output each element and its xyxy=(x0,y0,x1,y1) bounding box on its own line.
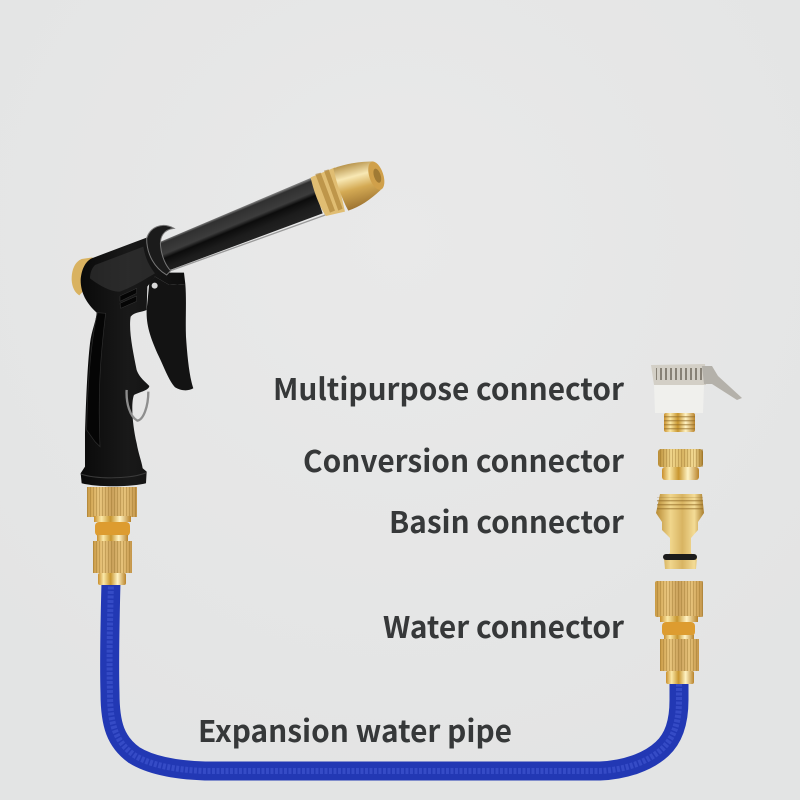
icon: trigger xyxy=(147,277,193,390)
icon: hanging ring xyxy=(127,390,148,421)
label: basin connector: Basin connector xyxy=(389,498,625,542)
barrel collar ring xyxy=(147,225,174,275)
threaded brass outlet xyxy=(664,413,695,432)
label: water connector: Water connector xyxy=(383,603,625,647)
vent slots xyxy=(120,288,137,308)
label: expansion water pipe: Expansion water pipe xyxy=(198,707,512,751)
water connector part xyxy=(655,581,703,684)
expansion water pipe hose xyxy=(110,582,679,771)
gun hose fitting xyxy=(87,487,137,585)
grip base collar edge xyxy=(81,473,147,478)
multipurpose connector part xyxy=(651,364,742,432)
grip side panel xyxy=(87,313,106,447)
gun side large knurled nut xyxy=(87,487,137,517)
polished ferrule xyxy=(666,671,694,684)
orange ring xyxy=(662,622,695,636)
black o-ring xyxy=(663,554,697,560)
hose side knurled nut xyxy=(93,541,132,573)
label: conversion connector: Conversion connector xyxy=(303,437,625,481)
icon: rear brass knob xyxy=(72,257,93,295)
gun body and grip xyxy=(81,238,185,486)
conversion connector part xyxy=(658,449,703,480)
barrel lower edge highlight xyxy=(171,215,325,271)
hose side polished ferrule xyxy=(98,573,126,585)
metal barrel xyxy=(161,178,323,271)
icon: trigger pin xyxy=(152,283,158,289)
basin connector part xyxy=(656,494,704,569)
label: multipurpose connector: Multipurpose connector xyxy=(273,365,625,409)
icon: brass nozzle xyxy=(311,160,387,216)
orange quick-connect ring xyxy=(95,522,130,536)
body shoulder highlight xyxy=(90,247,155,292)
upper knurled nut xyxy=(655,581,703,617)
steel hose clamp xyxy=(651,364,706,385)
lower knurled nut xyxy=(660,639,699,671)
spray gun xyxy=(72,160,387,486)
white plastic sleeve xyxy=(654,385,704,413)
